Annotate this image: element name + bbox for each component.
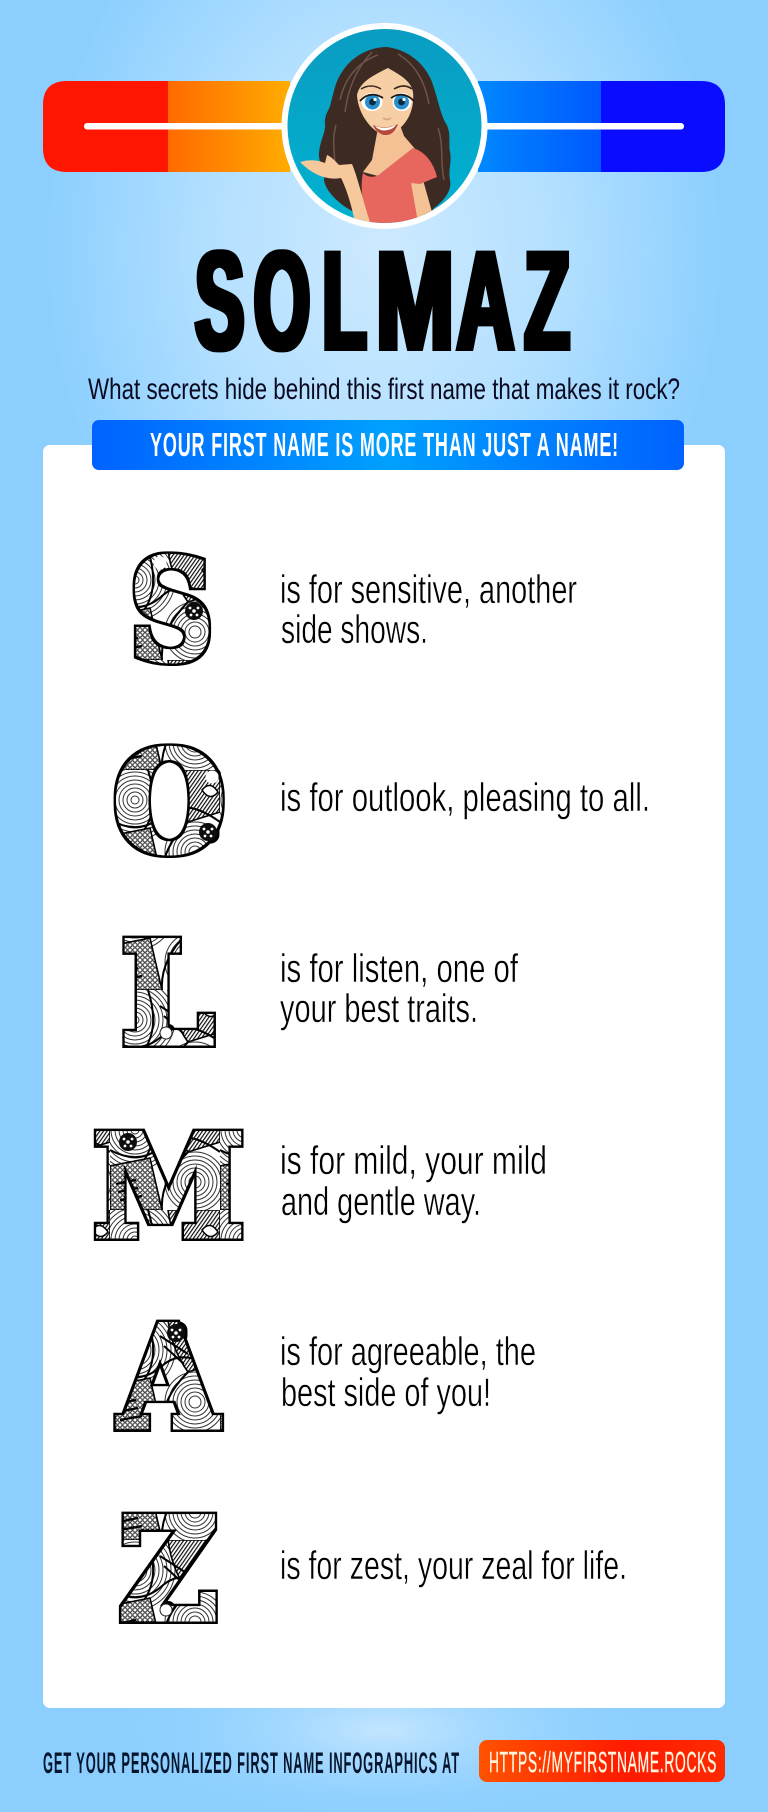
text: A line	[280, 1330, 536, 1415]
row: letter O	[114, 722, 650, 884]
nose	[383, 118, 391, 120]
face	[357, 68, 413, 136]
row: letter Z	[119, 1488, 627, 1652]
row: letter S	[130, 530, 577, 692]
title: A	[457, 222, 514, 379]
row: letter L	[122, 912, 519, 1076]
text: S line	[280, 568, 577, 652]
doodle letter S: S	[130, 530, 213, 692]
eyebrows	[361, 86, 412, 89]
text: S line: is for sensitive, another	[280, 568, 577, 612]
title: S	[195, 222, 244, 379]
banner	[92, 420, 684, 470]
title: L	[322, 222, 366, 379]
text: L line: is for listen, one of	[280, 947, 519, 991]
white content panel	[43, 445, 725, 1708]
title: M	[376, 222, 454, 379]
right arm	[411, 182, 432, 220]
doodle letter Z: Z	[119, 1488, 217, 1652]
header ribbon bar	[43, 81, 725, 172]
hair highlights	[333, 52, 444, 180]
hair	[319, 47, 451, 222]
left arm and hand	[300, 155, 370, 222]
doodle letter M: M	[94, 1104, 244, 1268]
title: Z	[525, 222, 570, 379]
shirt	[362, 148, 437, 228]
row: letter M	[94, 1104, 547, 1268]
neck	[363, 125, 416, 176]
text: L line	[280, 947, 519, 1031]
text: M line: is for mild, your mild	[280, 1139, 547, 1183]
text: A line: best side of you!	[281, 1371, 491, 1415]
row: letter A	[118, 1296, 536, 1460]
title	[195, 222, 570, 379]
avatar portrait	[282, 23, 488, 229]
footer url button	[479, 1740, 725, 1782]
text: S line: side shows.	[281, 608, 428, 652]
doodle letter O: O	[114, 722, 225, 884]
text: M line: and gentle way.	[281, 1180, 481, 1224]
text: Z line: is for zest, your zeal for life.	[280, 1544, 627, 1588]
text: M line	[280, 1139, 547, 1224]
title: O	[254, 222, 310, 379]
eyes	[360, 93, 414, 111]
mouth	[373, 124, 398, 135]
text: A line: is for agreeable, the	[280, 1330, 536, 1374]
doodle letter A: A	[118, 1296, 219, 1460]
text: L line: your best traits.	[280, 987, 478, 1031]
doodle letter L: L	[122, 912, 214, 1076]
